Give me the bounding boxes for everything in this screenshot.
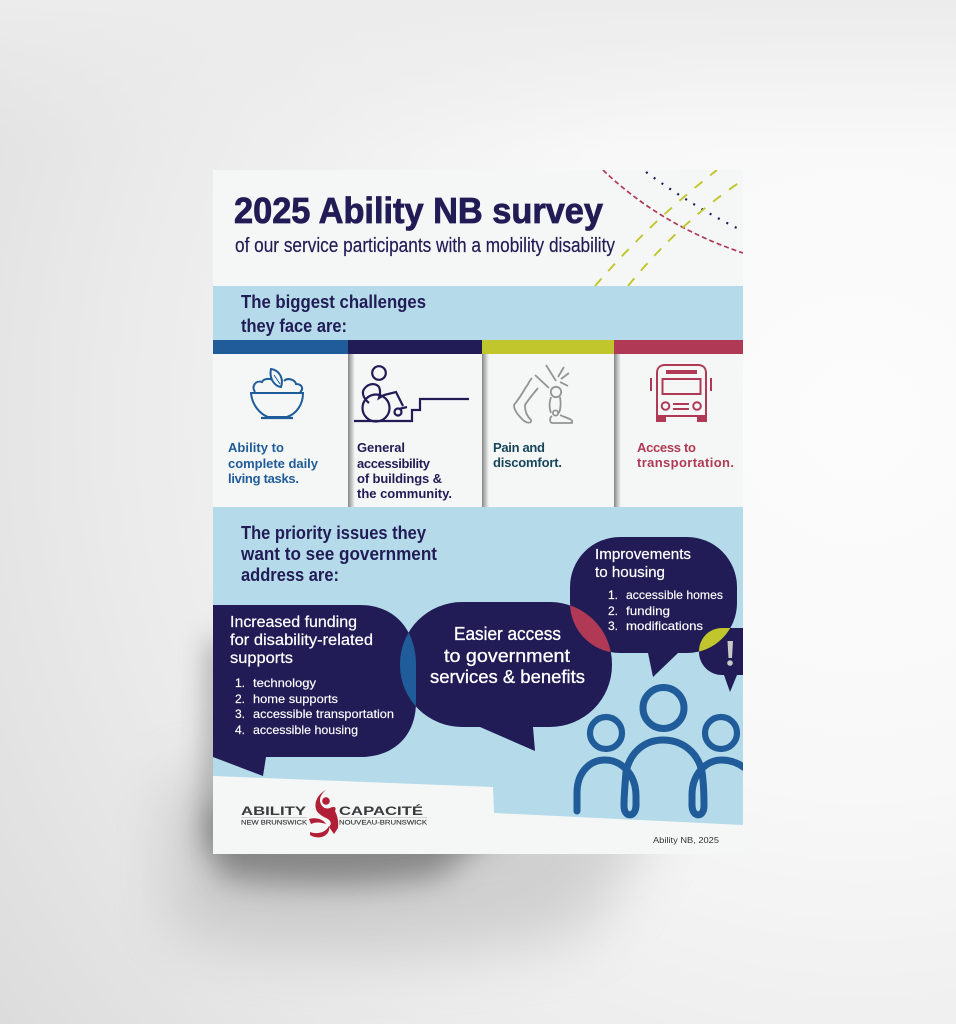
icon: food bowl (250, 369, 304, 418)
bubble: easier access: Easier access (454, 624, 561, 644)
list: housing priorities: funding (626, 604, 670, 618)
page background (213, 170, 680, 854)
text: daily living: living tasks. (228, 471, 299, 486)
logo: Ability New Brunswick: NEW BRUNSWICK (241, 820, 308, 826)
list: housing priorities: 1. (608, 588, 618, 602)
text: accessibility: accessibility (357, 456, 431, 471)
panel: daily living (213, 340, 348, 486)
bubble: easier access (400, 602, 612, 751)
text: accessibility (357, 440, 452, 501)
bubble: improvements to housing: to housing (595, 564, 665, 581)
icon: wheelchair and steps (354, 366, 469, 422)
source note: Ability NB, 2025 (653, 835, 719, 845)
bubble: improvements to housing: Improvements (595, 546, 691, 563)
bubble: increased funding: Increased funding (230, 614, 357, 631)
text: accessibility: of buildings & (357, 471, 442, 486)
list: funding priorities: 2. (235, 692, 245, 706)
panel: accessibility (348, 340, 482, 507)
text: transportation (637, 443, 734, 470)
list: funding priorities: 3. (235, 707, 245, 721)
bubble: increased funding: supports (230, 650, 293, 667)
bubble: increased funding (213, 605, 416, 776)
page drop shadow (170, 640, 680, 956)
list: funding priorities: 4. (235, 723, 245, 737)
priority heading: The priority issues they (241, 523, 426, 543)
panel: pain (482, 340, 614, 507)
text: transportation: transportation. (637, 455, 734, 470)
text: accessibility: General (357, 440, 405, 455)
text: transportation: Access to (637, 440, 696, 455)
bubble: easier access: services & benefits (430, 667, 585, 687)
list: funding priorities: accessible housing (253, 723, 358, 737)
logo: Ability New Brunswick: NOUVEAU-BRUNSWICK (339, 820, 428, 826)
text: daily living: Ability to (228, 440, 284, 455)
list: funding priorities (235, 676, 394, 737)
text: daily living: complete daily (228, 456, 319, 471)
text: pain: Pain and (493, 440, 545, 455)
logo: Ability New Brunswick: CAPACITÉ (339, 805, 423, 818)
text: pain (494, 442, 562, 467)
subtitle: of our service participants with a mobility disability (235, 235, 615, 257)
logo: Ability New Brunswick: ABILITY (241, 806, 306, 818)
list: housing priorities: 3. (608, 619, 618, 633)
list: housing priorities (608, 588, 723, 633)
list: housing priorities: modifications (626, 619, 703, 633)
list: funding priorities: technology (253, 676, 316, 690)
text: daily living (228, 440, 319, 486)
bubble: exclamation (699, 628, 743, 692)
text: pain: discomfort. (493, 455, 562, 470)
bubble: improvements to housing (570, 537, 737, 677)
priority heading: address are: (241, 565, 339, 585)
band: challenges heading: they face are: (241, 316, 347, 336)
lower blue panel (213, 507, 743, 825)
list: housing priorities: 2. (608, 604, 618, 618)
band: challenges heading (213, 286, 743, 340)
icon: leg with knee pain (514, 365, 572, 423)
bubble: increased funding: for disability-related (230, 632, 373, 649)
logo: Ability New Brunswick (241, 790, 428, 837)
list: funding priorities: 1. (235, 676, 245, 690)
overlap: blue lens (400, 632, 416, 706)
bubble: easier access: to government (444, 646, 570, 666)
overlap: red lens (570, 606, 611, 652)
priority heading: want to see government (240, 544, 437, 564)
text: accessibility: the community. (357, 486, 452, 501)
infographic page (213, 170, 745, 854)
logo figure (309, 790, 338, 837)
band: challenges heading: The biggest challenges (241, 292, 426, 312)
list: funding priorities: accessible transportation (253, 707, 394, 721)
icon: bus (651, 365, 711, 422)
title: 2025 Ability NB survey (234, 190, 603, 231)
list: housing priorities: accessible homes (626, 588, 723, 602)
panel: transportation (614, 340, 743, 507)
decorative dashed curves (595, 170, 743, 286)
priority heading (241, 526, 437, 581)
list: funding priorities: home supports (253, 692, 338, 706)
icon: group of people (577, 688, 745, 815)
